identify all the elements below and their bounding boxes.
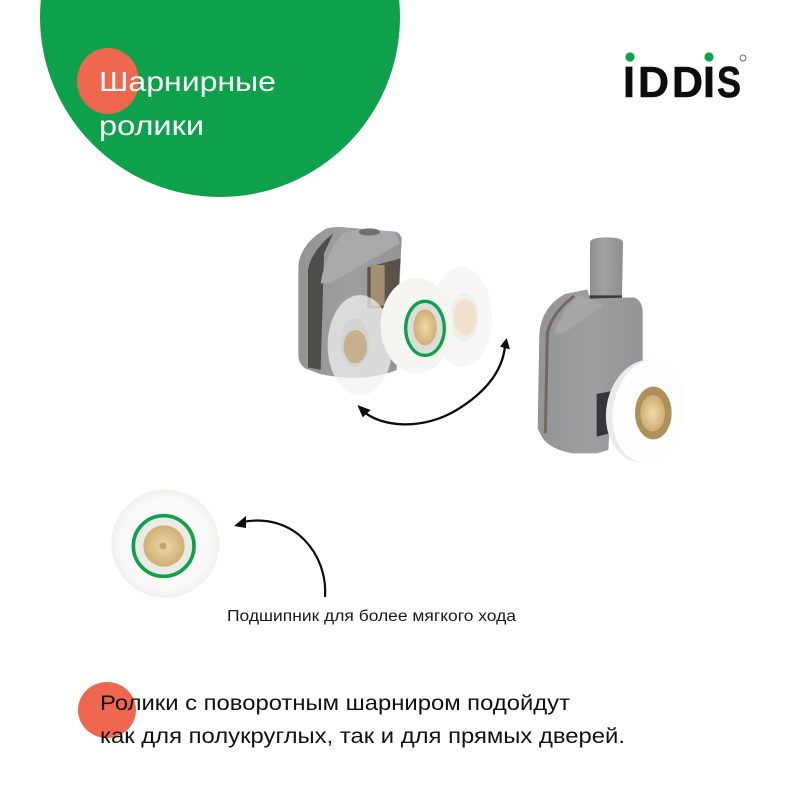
adjustment screw (371, 265, 385, 306)
callout arrow to bearing (234, 516, 325, 597)
IDDIS logo (623, 52, 746, 107)
bearing (134, 517, 193, 575)
title: Шарнирные (99, 66, 276, 97)
bottom text (100, 691, 625, 748)
product photo: assembled roller (538, 237, 693, 469)
main brass pin (413, 309, 437, 345)
housing notch (597, 391, 613, 437)
right ghost brass pin (454, 299, 476, 335)
pin centre (159, 542, 167, 550)
wheel (605, 354, 693, 468)
green highlight ring (406, 301, 444, 355)
IDDIS logo: I (623, 58, 635, 107)
rotation arrow (357, 338, 510, 424)
pin (590, 237, 623, 297)
bearing close-up roller (111, 490, 219, 598)
bottom text: Ролики с поворотным шарниром подойдут (100, 691, 570, 715)
IDDIS logo: S (717, 58, 741, 107)
bottom text: как для полукруглых, так и для прямых дверей. (100, 724, 625, 748)
right ghost roller (431, 267, 492, 367)
bronze bearing (635, 387, 672, 439)
main bearing (407, 303, 443, 354)
white roller (111, 490, 219, 598)
right ghost bearing (449, 293, 479, 341)
housing top hole (359, 228, 380, 236)
brass pin (640, 395, 665, 432)
housing (538, 289, 643, 453)
left ghost bearing (341, 319, 370, 367)
IDDIS logo: D (672, 58, 703, 107)
housing slit (545, 296, 574, 433)
callout text: Подшипник для более мягкого хода (227, 608, 516, 625)
IDDIS logo: I (703, 58, 715, 107)
brass pin (143, 525, 185, 567)
product photo: disassembled roller with translucent swivel positions (298, 227, 510, 424)
green highlight ring (133, 516, 194, 576)
housing silhouette (298, 227, 402, 378)
green header circle (40, 0, 400, 197)
housing hood highlight (321, 229, 400, 283)
housing hood highlight (553, 295, 603, 333)
bottom text accent blob (78, 682, 136, 738)
left ghost roller (328, 295, 392, 396)
collar (589, 295, 622, 300)
title (99, 66, 276, 141)
IDDIS logo: D (638, 58, 669, 107)
wheel edge (598, 353, 693, 469)
title: ролики (99, 110, 204, 141)
housing slot (308, 233, 333, 370)
housing window with screw (367, 258, 401, 308)
title accent blob (77, 48, 139, 114)
main roller (381, 278, 453, 373)
left ghost brass pin (344, 330, 367, 363)
